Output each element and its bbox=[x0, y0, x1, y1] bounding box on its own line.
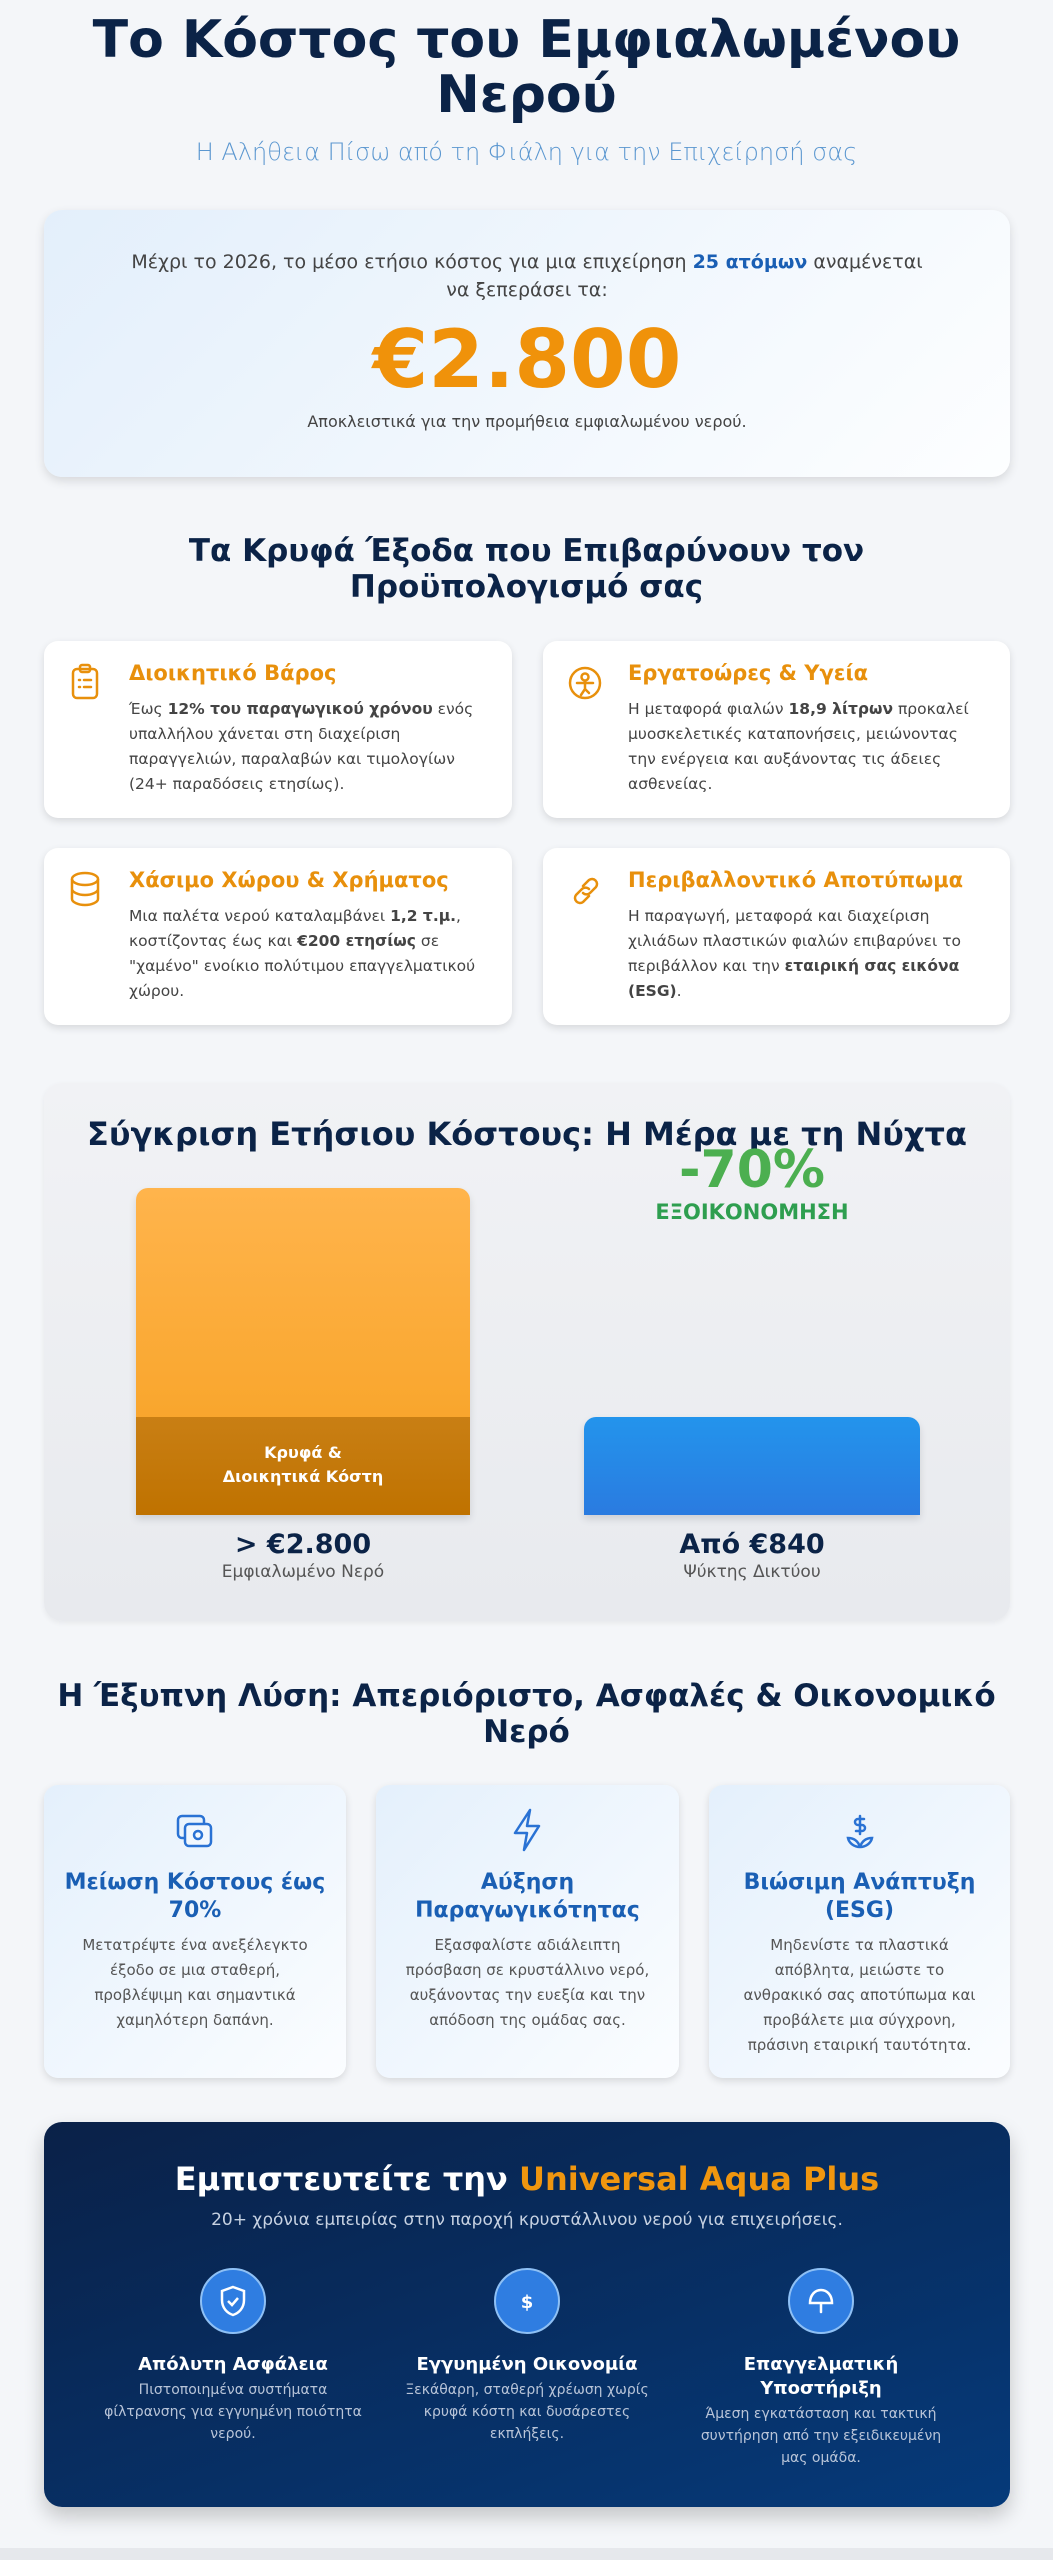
icon: dollar plant bbox=[846, 1814, 874, 1848]
hero cost card bbox=[44, 210, 1010, 477]
body: Η μεταφορά φιαλών 18,9 λίτρων προκαλεί μυοσκελετικές καταπονήσεις, μειώνοντας την ενέργεια και αυξάνοντας τις άδειες ασθενείας. bbox=[628, 700, 969, 793]
panel: labor & health bbox=[543, 641, 1010, 818]
title bbox=[92, 10, 960, 125]
body: Μια παλέτα νερού καταλαμβάνει 1,2 τ.μ., κοστίζοντας έως και €200 ετησίως σε "χαμένο" ενοίκιο πολύτιμου επαγγελματικού χώρου. bbox=[129, 907, 475, 1000]
savings callout bbox=[655, 1140, 849, 1224]
feature: support: Άμεση εγκατάσταση και τακτική συντήρηση από την εξειδικευμένη μας ομάδα. bbox=[701, 2406, 941, 2466]
label: bottled bbox=[222, 1529, 384, 1582]
hidden costs segment bbox=[136, 1417, 470, 1515]
panel: admin burden bbox=[44, 641, 512, 818]
title: Αύξηση Παραγωγικότητας bbox=[415, 1870, 640, 1923]
title: Το Κόστος του Εμφιαλωμένου bbox=[93, 10, 960, 70]
feature: support bbox=[701, 2268, 941, 2466]
footnote: Αποκλειστικά για την προμήθεια εμφιαλωμένου νερού. bbox=[307, 412, 747, 431]
icon: dollar: $ bbox=[521, 2292, 533, 2313]
icon: money bbox=[176, 1814, 212, 1848]
intro text: να ξεπεράσει τα: bbox=[446, 279, 608, 301]
trust subtitle: 20+ χρόνια εμπειρίας στην παροχή κρυστάλλινου νερού για επιχειρήσεις. bbox=[211, 2210, 843, 2230]
panel: cost reduction bbox=[44, 1785, 346, 2078]
body: Μηδενίστε τα πλαστικά απόβλητα, μειώστε το ανθρακικό σας αποτύπωμα και προβάλετε μια σύγχρονη, πράσινη εταιρική ταυτότητα. bbox=[744, 1936, 975, 2054]
body: Η παραγωγή, μεταφορά και διαχείριση χιλιάδων πλαστικών φιαλών επιβαρύνει το περιβάλλον και την εταιρική σας εικόνα (ESG). bbox=[628, 907, 961, 1000]
feature: safety bbox=[104, 2268, 362, 2442]
savings callout: ΕΞΟΙΚΟΝΟΜΗΣΗ bbox=[655, 1200, 849, 1224]
icon: chain bbox=[574, 878, 598, 904]
icon: shield bbox=[200, 2268, 266, 2334]
heading: smart solution: Νερό bbox=[483, 1714, 570, 1750]
panel: cost comparison chart bbox=[44, 1083, 1010, 1621]
hidden costs segment: Διοικητικά Κόστη bbox=[223, 1467, 383, 1486]
icon: dollar bbox=[494, 2268, 560, 2334]
chart title: Σύγκριση Ετήσιου Κόστους: Η Μέρα με τη Νύχτα bbox=[87, 1115, 967, 1153]
title: Περιβαλλοντικό Αποτύπωμα bbox=[628, 868, 963, 892]
icon: support bbox=[788, 2268, 854, 2334]
label: cooler: Ψύκτης Δικτύου bbox=[683, 1562, 821, 1582]
subtitle: Η Αλήθεια Πίσω από τη Φιάλη για την Επιχείρησή σας bbox=[196, 138, 857, 166]
body: Έως 12% του παραγωγικού χρόνου ενός υπαλλήλου χάνεται στη διαχείριση παραγγελιών, παραλαβών και τιμολογίων (24+ παραδόσεις ετησίως). bbox=[129, 700, 473, 793]
feature: safety: Πιστοποιημένα συστήματα φίλτρανσης για εγγυημένη ποιότητα νερού. bbox=[104, 2382, 362, 2442]
icon: lightning bbox=[514, 1808, 540, 1852]
panel: wasted space bbox=[44, 848, 512, 1025]
heading: smart solution: Η Έξυπνη Λύση: Απεριόριστο, Ασφαλές & Οικονομικό bbox=[57, 1678, 996, 1714]
title: Εργατοώρες & Υγεία bbox=[628, 661, 868, 685]
feature: economy bbox=[405, 2268, 649, 2442]
icon: person circle bbox=[568, 666, 602, 700]
savings callout: -70% bbox=[679, 1140, 825, 1200]
hidden costs segment: Κρυφά & bbox=[264, 1443, 342, 1462]
intro text bbox=[131, 251, 923, 301]
title: Νερού bbox=[436, 65, 617, 125]
feature: economy: Εγγυημένη Οικονομία bbox=[416, 2354, 638, 2375]
feature: safety: Απόλυτη Ασφάλεια bbox=[138, 2354, 328, 2375]
panel: environmental footprint bbox=[543, 848, 1010, 1025]
trust title: Εμπιστευτείτε την Universal Aqua Plus bbox=[175, 2160, 879, 2198]
title: Διοικητικό Βάρος bbox=[129, 661, 336, 685]
panel: productivity bbox=[376, 1785, 679, 2078]
title: Μείωση Κόστους έως 70% bbox=[65, 1870, 325, 1923]
icon: clipboard bbox=[72, 664, 98, 700]
heading: hidden costs: Προϋπολογισμό σας bbox=[350, 569, 703, 605]
heading: smart solution bbox=[57, 1678, 996, 1750]
big number: €2.800 bbox=[373, 313, 681, 406]
panel: sustainability bbox=[709, 1785, 1010, 2078]
feature: economy: Ξεκάθαρη, σταθερή χρέωση χωρίς κρυφά κόστη και δυσάρεστες εκπλήξεις. bbox=[405, 2382, 649, 2442]
icon: coins bbox=[70, 872, 100, 906]
bar: bottled water bbox=[136, 1188, 470, 1515]
label: cooler: Από €840 bbox=[679, 1529, 825, 1560]
heading: hidden costs: Τα Κρυφά Έξοδα που Επιβαρύνουν τον bbox=[189, 533, 864, 569]
title: Χάσιμο Χώρου & Χρήματος bbox=[129, 868, 449, 892]
label: bottled: Εμφιαλωμένο Νερό bbox=[222, 1562, 384, 1582]
feature: support: Υποστήριξη bbox=[760, 2378, 882, 2399]
bar: network cooler bbox=[584, 1417, 920, 1515]
label: cooler bbox=[679, 1529, 825, 1582]
body: Μετατρέψτε ένα ανεξέλεγκτο έξοδο σε μια σταθερή, προβλέψιμη και σημαντικά χαμηλότερη δαπάνη. bbox=[82, 1936, 308, 2029]
heading: hidden costs bbox=[189, 533, 864, 605]
title: Βιώσιμη Ανάπτυξη (ESG) bbox=[744, 1870, 975, 1923]
panel: trust Universal Aqua Plus bbox=[44, 2122, 1010, 2507]
feature: support: Επαγγελματική bbox=[744, 2354, 898, 2375]
body: Εξασφαλίστε αδιάλειπτη πρόσβαση σε κρυστάλλινο νερό, αυξάνοντας την ευεξία και την απόδοση της ομάδας σας. bbox=[406, 1936, 649, 2029]
label: bottled: > €2.800 bbox=[235, 1529, 371, 1560]
intro text: Μέχρι το 2026, το μέσο ετήσιο κόστος για μια επιχείρηση 25 ατόμων αναμένεται bbox=[131, 251, 923, 273]
